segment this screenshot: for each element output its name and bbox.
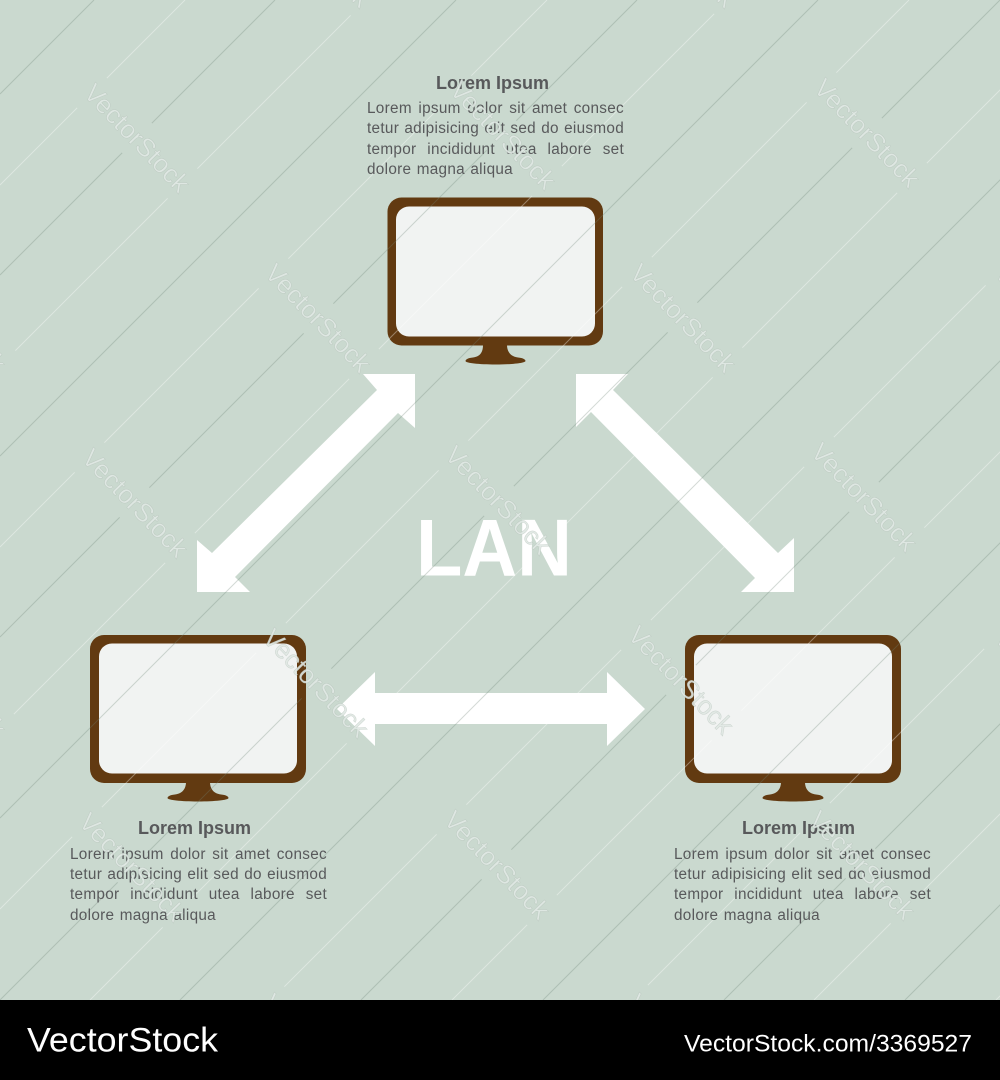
text block: left body: tempor incididunt utea labore set bbox=[70, 886, 327, 903]
text block: top body: tetur adipisicing elit sed do eiusmod bbox=[367, 120, 624, 137]
text block: right body: tempor incididunt utea labore set bbox=[674, 886, 931, 903]
text block: left title: Lorem Ipsum bbox=[138, 818, 251, 838]
VectorStock watermarks: VectorStock bbox=[624, 258, 743, 379]
VectorStock watermarks: VectorStock bbox=[808, 73, 927, 194]
VectorStock watermarks: VectorStock bbox=[438, 805, 557, 926]
footer brand: VectorStock bbox=[27, 1022, 219, 1060]
text block: top body: tempor incididunt utea labore set bbox=[367, 141, 624, 158]
VectorStock watermarks: VectorStock bbox=[78, 78, 197, 199]
arrow: top monitor to bottom left monitor bbox=[197, 374, 415, 592]
text block: left body: Lorem ipsum dolor sit amet consec bbox=[70, 846, 327, 862]
text block: left body: tetur adipisicing elit sed do eiusmod bbox=[70, 866, 327, 883]
monitor: top bbox=[388, 198, 603, 364]
VectorStock watermarks: VectorStock bbox=[76, 443, 195, 564]
VectorStock watermarks: VectorStock bbox=[257, 623, 376, 744]
text block: right body bbox=[674, 846, 931, 924]
text block: top body: Lorem ipsum dolor sit amet consec bbox=[367, 100, 624, 117]
VectorStock watermarks: VectorStock bbox=[622, 620, 741, 741]
text block: top body bbox=[367, 100, 624, 178]
text block: right body: dolore magna aliqua bbox=[674, 907, 820, 924]
text block: right body: tetur adipisicing elit sed do eiusmod bbox=[674, 866, 931, 883]
text block: left body bbox=[70, 846, 327, 924]
monitor: bottom left bbox=[90, 635, 306, 802]
VectorStock watermarks: VectorStock bbox=[805, 437, 924, 558]
monitor: bottom right bbox=[685, 635, 901, 802]
footer image id: VectorStock.com/3369527 bbox=[684, 1030, 972, 1058]
text block: right title: Lorem Ipsum bbox=[742, 818, 855, 838]
VectorStock watermarks: VectorStock bbox=[73, 807, 192, 928]
VectorStock watermarks: VectorStock bbox=[259, 258, 378, 379]
text block: top body: dolore magna aliqua bbox=[367, 161, 513, 178]
text block: right body: Lorem ipsum dolor sit amet consec bbox=[674, 846, 931, 862]
arrow: between bottom monitors bbox=[337, 672, 645, 746]
arrow: top monitor to bottom right monitor bbox=[576, 374, 794, 592]
footer bar bbox=[0, 1000, 1000, 1080]
VectorStock watermarks: VectorStock bbox=[803, 805, 922, 926]
LAN label: LAN bbox=[416, 504, 572, 594]
VectorStock watermarks: VectorStock bbox=[444, 75, 563, 196]
text block: left body: dolore magna aliqua bbox=[70, 907, 216, 924]
text block: top title: Lorem Ipsum bbox=[436, 72, 549, 92]
VectorStock watermarks: VectorStock bbox=[439, 440, 558, 561]
